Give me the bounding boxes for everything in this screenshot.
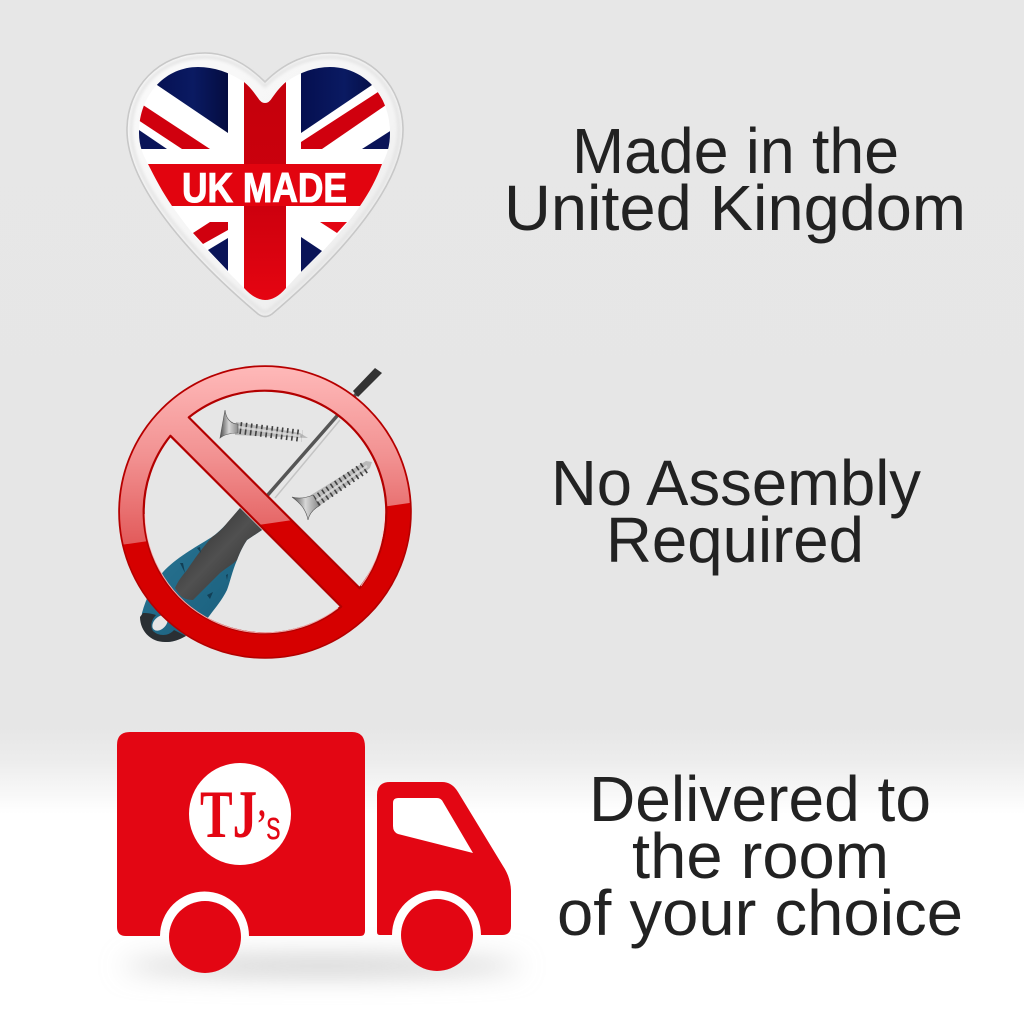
heading: delivered to the room of your choice xyxy=(557,763,963,949)
icon: UK made heart badge xyxy=(120,50,410,316)
truck window xyxy=(393,798,473,853)
logo circle xyxy=(189,763,291,865)
heading: made in the United Kingdom: Made in the xyxy=(572,115,899,187)
heading: no assembly required: No Assembly xyxy=(551,447,921,519)
heading: made in the United Kingdom xyxy=(504,115,966,244)
heading: made in the United Kingdom: United Kingdom xyxy=(504,172,966,244)
rear wheel xyxy=(169,901,241,973)
logo text: s xyxy=(266,803,281,848)
icon: delivery truck xyxy=(117,732,522,974)
heading: no assembly required xyxy=(551,447,921,576)
truck cab xyxy=(377,782,511,935)
icon: no assembly sign with screwdriver and screws xyxy=(119,366,411,658)
heading: delivered to the room of your choice: the room xyxy=(632,820,889,892)
icon: screw two xyxy=(292,461,372,520)
truck box xyxy=(117,732,365,936)
icon: screw one xyxy=(220,410,308,438)
icon: red prohibition ring xyxy=(119,366,411,658)
front wheel xyxy=(401,899,473,971)
truck shadow xyxy=(122,958,522,974)
text: UK MADE: UK MADE xyxy=(182,164,347,211)
icon: screwdriver xyxy=(140,368,382,642)
logo text: TJ xyxy=(200,776,257,852)
handle grip marks xyxy=(180,547,228,599)
heading: delivered to the room of your choice: of your choice xyxy=(557,877,963,949)
heading: delivered to the room of your choice: Delivered to xyxy=(589,763,931,835)
heading: no assembly required: Required xyxy=(606,504,864,576)
logo text: ’ xyxy=(257,801,266,846)
